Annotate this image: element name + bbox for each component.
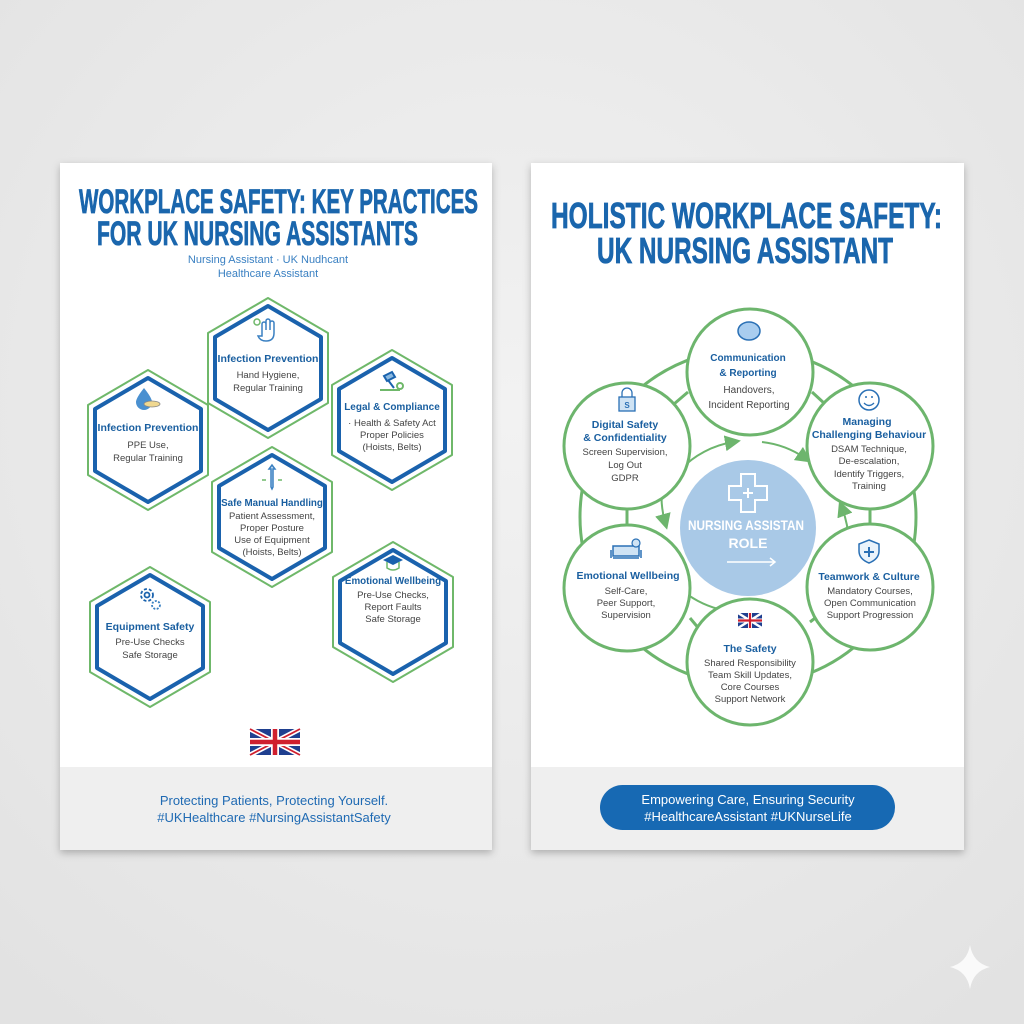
- circle: teamwork & culture: Open Communication: [824, 598, 916, 609]
- footer pill: right: #HealthcareAssistant #UKNurseLife: [644, 809, 852, 824]
- circle: the safety: [687, 599, 813, 725]
- circle: managing challenging behaviour: Challenging Behaviour: [812, 429, 926, 441]
- circle: emotional wellbeing: [564, 525, 690, 651]
- title: left: WORKPLACE SAFETY: KEY PRACTICES: [79, 183, 478, 221]
- center: nursing assistant role: [680, 460, 816, 596]
- center: nursing assistant role: NURSING ASSISTAN: [688, 517, 804, 533]
- circle: emotional wellbeing: Supervision: [601, 610, 651, 621]
- circle: managing challenging behaviour: Identify Triggers,: [834, 469, 904, 480]
- hexagon: emotional wellbeing: [333, 542, 453, 682]
- footer text: left: Protecting Patients, Protecting Yourself.: [160, 793, 388, 808]
- title: right: UK NURSING ASSISTANT: [597, 230, 893, 271]
- circle: the safety: The Safety: [723, 643, 777, 655]
- hexagon: infection prevention top: Regular Training: [233, 383, 303, 394]
- circle: communication & reporting: Incident Reporting: [708, 400, 790, 411]
- footer text: left: #UKHealthcare #NursingAssistantSafety: [157, 810, 391, 825]
- circle: managing challenging behaviour: DSAM Technique,: [831, 444, 907, 455]
- hexagon: emotional wellbeing: Safe Storage: [365, 614, 421, 625]
- circle: teamwork & culture: Mandatory Courses,: [827, 586, 913, 597]
- hexagon: safe manual handling: (Hoists, Belts): [242, 547, 302, 558]
- circle: communication & reporting: & Reporting: [719, 368, 777, 379]
- subtitle: Healthcare Assistant: [218, 268, 318, 280]
- circle: the safety: Support Network: [715, 694, 786, 705]
- circle: the safety: Team Skill Updates,: [708, 670, 792, 681]
- hexagon: safe manual handling: [212, 447, 332, 587]
- footer pill: right: Empowering Care, Ensuring Security: [641, 792, 855, 807]
- circle: teamwork & culture: Support Progression: [827, 610, 913, 621]
- circle: managing challenging behaviour: De-escalation,: [839, 456, 899, 467]
- circle: communication & reporting: Communication: [710, 353, 786, 364]
- circle: digital safety & confidentiality: [564, 383, 690, 509]
- hexagon: infection prevention top: Hand Hygiene,: [237, 370, 299, 381]
- circle: digital safety & confidentiality: Screen Supervision,: [582, 447, 668, 458]
- circle: digital safety & confidentiality: S: [624, 401, 630, 410]
- circle: emotional wellbeing: Peer Support,: [597, 598, 655, 609]
- hexagon: equipment safety: Equipment Safety: [106, 621, 194, 633]
- hexagon: safe manual handling: Use of Equipment: [234, 535, 310, 546]
- title: left: [79, 183, 478, 253]
- hexagon: infection prevention left: PPE Use,: [127, 440, 169, 451]
- hexagon: equipment safety: [90, 567, 210, 707]
- hexagon: infection prevention left: [88, 370, 208, 510]
- circle: teamwork & culture: [807, 524, 933, 650]
- circle: digital safety & confidentiality: & Confidentiality: [583, 432, 667, 444]
- circle: emotional wellbeing: Self-Care,: [605, 586, 647, 597]
- title: right: [551, 195, 942, 271]
- title: left: FOR UK NURSING ASSISTANTS: [97, 215, 418, 253]
- hexagon: safe manual handling: Proper Posture: [240, 523, 304, 534]
- icon: sparkle: [950, 945, 990, 989]
- circle: communication & reporting: [687, 309, 813, 435]
- circle: digital safety & confidentiality: GDPR: [611, 473, 639, 484]
- circle: digital safety & confidentiality: Log Out: [608, 460, 642, 471]
- icon: UK flag: [250, 729, 300, 755]
- hexagon: equipment safety: Pre-Use Checks: [115, 637, 185, 648]
- circle: managing challenging behaviour: Managing: [842, 416, 892, 428]
- hexagon: legal & compliance: [332, 350, 452, 490]
- circle: teamwork & culture: Teamwork & Culture: [818, 571, 920, 583]
- hexagon: legal & compliance: · Health & Safety Act: [348, 418, 436, 429]
- hexagon: emotional wellbeing: Report Faults: [364, 602, 422, 613]
- center: nursing assistant role: ROLE: [729, 535, 767, 551]
- circle: managing challenging behaviour: [807, 383, 933, 509]
- hexagon: legal & compliance: Legal & Compliance: [344, 402, 440, 413]
- circle: managing challenging behaviour: Training: [852, 481, 886, 492]
- subtitle: [188, 254, 348, 280]
- circle: communication & reporting: Handovers,: [723, 385, 775, 396]
- footer text: left: [157, 793, 391, 825]
- hexagon: infection prevention left: Infection Prevention: [98, 422, 198, 434]
- hexagon: safe manual handling: Safe Manual Handling: [221, 498, 323, 509]
- hexagon: infection prevention top: Infection Prevention: [218, 353, 318, 365]
- hexagon: legal & compliance: Proper Policies: [360, 430, 424, 441]
- arrows: inner cycle: [662, 442, 848, 612]
- circle: emotional wellbeing: Emotional Wellbeing: [576, 570, 680, 582]
- panel: right poster: [531, 163, 964, 850]
- ring diagram: [564, 309, 933, 725]
- hexagon: legal & compliance: (Hoists, Belts): [362, 442, 422, 453]
- circle: digital safety & confidentiality: Digital Safety: [592, 419, 658, 431]
- panel: left poster: [60, 163, 492, 850]
- hexagon: emotional wellbeing: Emotional Wellbeing: [345, 576, 441, 587]
- circle: the safety: Core Courses: [721, 682, 780, 693]
- hexagon: infection prevention left: Regular Training: [113, 453, 183, 464]
- subtitle: Nursing Assistant · UK Nudhcant: [188, 254, 348, 266]
- hexagon: emotional wellbeing: Pre-Use Checks,: [357, 590, 429, 601]
- hexagon: infection prevention top: [208, 298, 328, 438]
- circle: the safety: Shared Responsibility: [704, 658, 796, 669]
- hexagon: safe manual handling: Patient Assessment,: [229, 511, 315, 522]
- footer pill: right: [600, 785, 895, 830]
- hexagon: equipment safety: Safe Storage: [122, 650, 178, 661]
